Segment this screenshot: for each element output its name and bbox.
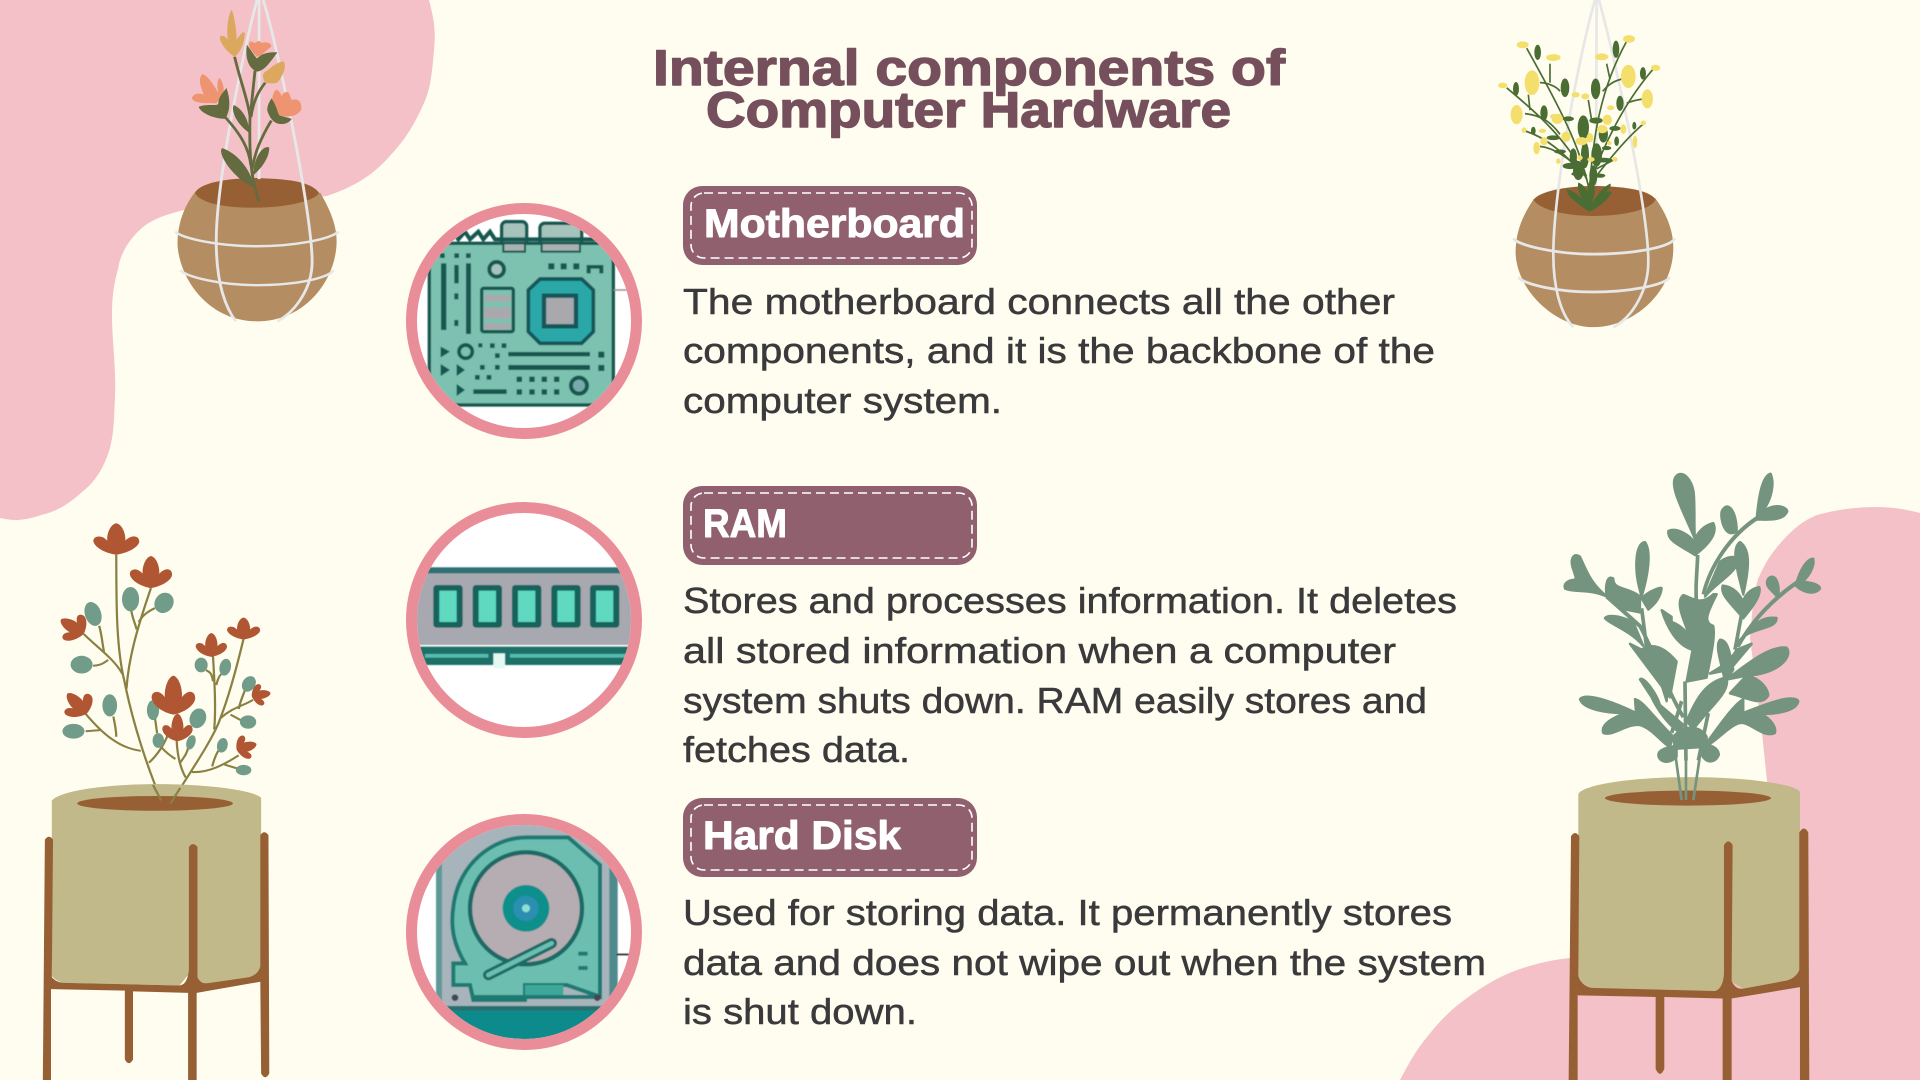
planter stand: [43, 832, 269, 1080]
yellow flower sprigs: [1498, 35, 1660, 212]
pot soil: [195, 178, 319, 208]
label: RAM: RAM: [703, 502, 787, 546]
text: motherboard description: components, and it is the backbone of the: [683, 330, 1435, 371]
stems: [84, 555, 253, 803]
text: RAM description: [683, 580, 1457, 770]
soil: [77, 796, 233, 811]
label: motherboard: Motherboard: [704, 202, 965, 246]
label: motherboard: [683, 186, 977, 265]
teal leaves: [62, 587, 259, 775]
stem bases in soil: [153, 785, 180, 803]
title: Internal components of: [653, 40, 1285, 96]
text: hard disk description: Used for storing data. It permanently stores: [683, 892, 1452, 933]
hanging plant: top right: [1498, 0, 1675, 327]
standing plant: bottom right: [1565, 474, 1820, 1080]
foliage: [1565, 474, 1820, 762]
rust flowers: [51, 523, 273, 761]
icon: hard disk: [412, 820, 636, 1044]
hanging strings: [175, 0, 339, 321]
text: RAM description: system shuts down. RAM easily stores and: [683, 680, 1427, 721]
label: RAM: [683, 486, 977, 565]
icon: motherboard: [412, 208, 636, 434]
text: RAM description: fetches data.: [683, 729, 910, 770]
stems in soil: [1674, 745, 1702, 800]
planter: [1578, 777, 1800, 991]
text: hard disk description: data and does not wipe out when the system: [683, 942, 1486, 983]
label: hard disk: Hard Disk: [703, 814, 902, 858]
blob: bottom right: [1400, 507, 1920, 1080]
row: RAM: [410, 486, 1457, 770]
flowers and leaves: [192, 10, 301, 188]
text: RAM description: Stores and processes information. It deletes: [683, 580, 1457, 621]
row: motherboard: [412, 186, 1435, 434]
row: hard disk: [412, 798, 1486, 1044]
text: motherboard description: The motherboard connects all the other: [683, 281, 1395, 322]
pot body: [1516, 198, 1673, 327]
hanging plant: top left: [175, 0, 339, 321]
soil: [1605, 791, 1771, 806]
label: hard disk: [683, 798, 977, 877]
text: motherboard description: [683, 281, 1435, 421]
icon: RAM: [410, 508, 637, 732]
title: Computer Hardware: [706, 82, 1231, 138]
text: hard disk description: is shut down.: [683, 991, 917, 1032]
planter: [52, 784, 261, 985]
pot body: [177, 191, 337, 321]
text: RAM description: all stored information when a computer: [683, 630, 1396, 671]
flower stems: [225, 57, 271, 201]
standing plant: bottom left: [43, 523, 273, 1080]
planter stand: [1569, 829, 1809, 1080]
title: [653, 40, 1285, 138]
text: hard disk description: [683, 892, 1486, 1032]
text: motherboard description: computer system.: [683, 380, 1002, 421]
blob: top left: [0, 0, 435, 520]
pot soil: [1533, 186, 1656, 216]
hanging strings: [1513, 0, 1675, 327]
